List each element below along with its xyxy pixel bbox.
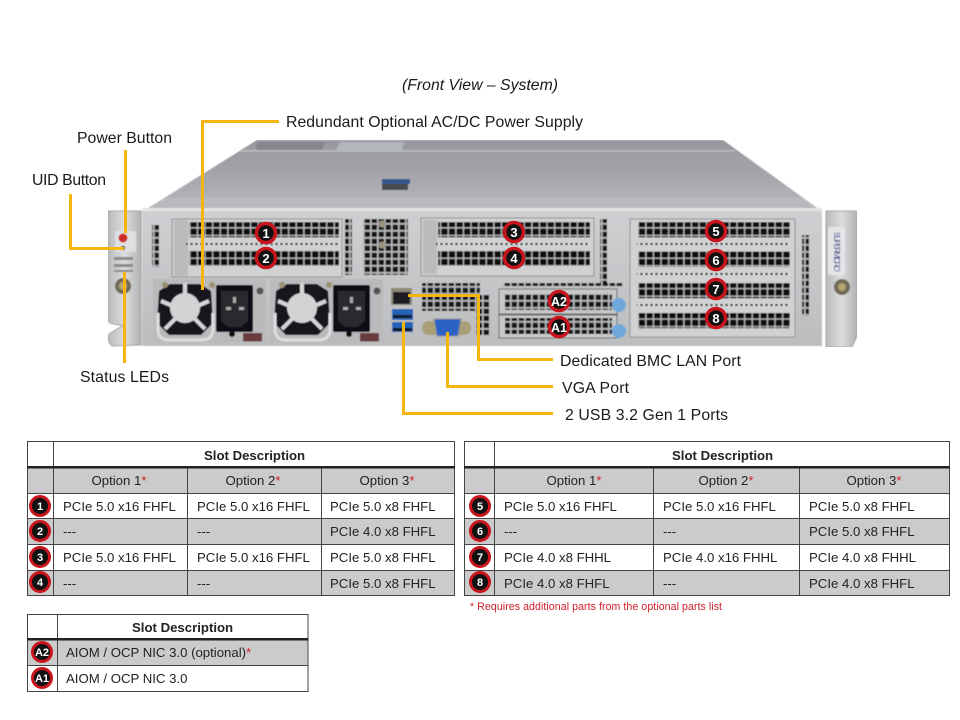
table: slots 5-8: --- xyxy=(504,524,517,539)
chassis front face xyxy=(142,208,822,346)
table: slots 1-4: PCIe 5.0 x16 FHFL xyxy=(63,550,176,565)
table: slots 5-8: 5 xyxy=(477,501,483,513)
power supply 2 xyxy=(270,279,383,342)
table: slots 5-8: PCIe 5.0 x16 FHFL xyxy=(663,499,776,514)
table: AIOM slots: AIOM / OCP NIC 3.0 xyxy=(66,671,187,686)
top labels xyxy=(240,142,735,190)
table: slots 1-4: PCIe 5.0 x8 FHFL xyxy=(330,499,436,514)
vent strip xyxy=(600,219,607,285)
slot number badges on chassis: 1 xyxy=(262,226,270,241)
table: slots 1-4: --- xyxy=(63,576,76,591)
table: slots 5-8: PCIe 4.0 x8 FHFL xyxy=(809,576,915,591)
centre vent grid xyxy=(345,219,408,275)
table: slots 1-4: 2 xyxy=(37,526,43,538)
table: slots 1-4: Option 1* xyxy=(92,473,146,488)
slot number badges on chassis: 6 xyxy=(712,253,720,268)
VGA port xyxy=(422,319,471,336)
table: slots 5-8: PCIe 5.0 x8 FHFL xyxy=(809,499,915,514)
slot number badges on chassis: 8 xyxy=(712,311,720,326)
table: slots 1-4: PCIe 4.0 x8 FHFL xyxy=(330,524,436,539)
right ear handle xyxy=(826,211,857,347)
table: slots 5-8: Option 1* xyxy=(546,473,602,488)
table: slots 1-4: PCIe 5.0 x16 FHFL xyxy=(197,550,310,565)
table: slots 5-8: PCIe 5.0 x8 FHFL xyxy=(809,524,915,539)
right vent column xyxy=(802,235,809,316)
slot number badges on chassis: A1 xyxy=(551,321,567,335)
table: slots 5-8: 6 xyxy=(477,526,483,538)
table: slots 1-4: --- xyxy=(197,524,210,539)
slot number badges on chassis: A2 xyxy=(551,295,567,309)
table: slots 1-4: 3 xyxy=(37,552,43,564)
riser 5-8 bracket xyxy=(630,219,795,337)
table: slots 5-8: Option 3* xyxy=(846,473,902,488)
AIOM slot bays xyxy=(499,289,626,338)
table: slots 5-8: Option 2* xyxy=(698,473,754,488)
table: slots 5-8: PCIe 4.0 x8 FHFL xyxy=(504,576,610,591)
label: VGA port: VGA Port xyxy=(562,380,630,397)
chassis top cover xyxy=(145,140,820,210)
table: slots 1-4: 1 xyxy=(37,501,43,513)
table: slots 1-4: Option 3* xyxy=(360,473,414,488)
vent block beside LAN xyxy=(422,283,480,311)
table: slots 1-4 xyxy=(27,441,455,596)
label: UID button: UID Button xyxy=(32,172,106,189)
table: slots 1-4: --- xyxy=(63,524,76,539)
table: slots 5-8: PCIe 4.0 x16 FHHL xyxy=(663,550,777,565)
slot number badges on chassis xyxy=(256,222,726,336)
slot number badges on chassis: 5 xyxy=(712,224,720,239)
USB ports xyxy=(392,309,413,332)
table: AIOM slots: AIOM / OCP NIC 3.0 (optional)* xyxy=(66,645,251,660)
table: slots 1-4: 4 xyxy=(37,577,44,589)
label: power supply: Redundant Optional AC/DC Power Supply xyxy=(286,114,583,131)
table: AIOM slots: Slot Description xyxy=(132,620,233,635)
table: slots 5-8 xyxy=(464,441,950,596)
label: USB ports: 2 USB 3.2 Gen 1 Ports xyxy=(565,407,728,424)
table: slots 5-8: 8 xyxy=(477,577,483,589)
label: BMC LAN port: Dedicated BMC LAN Port xyxy=(560,353,742,370)
table: slots 1-4: PCIe 5.0 x16 FHFL xyxy=(197,499,310,514)
table: slots 1-4: Slot Description xyxy=(204,448,305,463)
table: slots 1-4: PCIe 5.0 x16 FHFL xyxy=(63,499,176,514)
table: slots 5-8: 7 xyxy=(477,552,483,564)
slot number badges on chassis: 2 xyxy=(262,251,270,266)
riser 3-4 bracket xyxy=(421,218,594,276)
table: slots 1-4: PCIe 5.0 x8 FHFL xyxy=(330,550,436,565)
table: slots 1-4: --- xyxy=(197,576,210,591)
right ear handle: SUPERMICRO xyxy=(832,232,841,272)
table: AIOM slots: A1 xyxy=(35,673,49,685)
server chassis photo xyxy=(108,140,857,347)
slot number badges on chassis: 7 xyxy=(712,282,720,297)
table: slots 1-4: PCIe 5.0 x8 FHFL xyxy=(330,576,436,591)
footnote: * Requires additional parts from the optional parts list xyxy=(470,601,722,613)
label: power button: Power Button xyxy=(77,130,172,147)
callout lines xyxy=(70,122,553,414)
table: slots 5-8: Slot Description xyxy=(672,448,773,463)
table: slots 5-8: --- xyxy=(663,576,676,591)
table: slots 5-8: PCIe 4.0 x8 FHHL xyxy=(809,550,916,565)
left ear handle xyxy=(108,211,141,346)
slot number badges on chassis: 4 xyxy=(510,251,518,266)
table: slots 1-4: Option 2* xyxy=(226,473,280,488)
LAN port xyxy=(391,288,412,305)
slot number badges on chassis: 3 xyxy=(510,225,518,240)
table: AIOM slots: A2 xyxy=(35,647,49,659)
table: AIOM slots xyxy=(27,614,308,692)
left vent column xyxy=(152,225,159,267)
riser 1-2 bracket xyxy=(172,219,342,277)
power supply 1 xyxy=(153,279,266,342)
table: slots 5-8: --- xyxy=(663,524,676,539)
table: slots 5-8: PCIe 5.0 x16 FHFL xyxy=(504,499,617,514)
label: status LEDs: Status LEDs xyxy=(80,369,169,386)
title: (Front View – System) xyxy=(402,77,558,94)
table: slots 5-8: PCIe 4.0 x8 FHHL xyxy=(504,550,611,565)
